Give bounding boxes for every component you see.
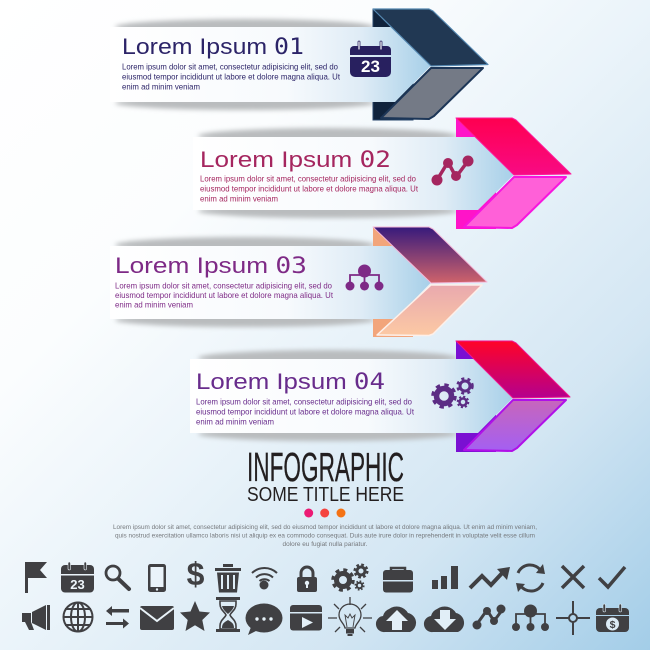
- arrow 4: [190, 341, 570, 452]
- icon: gears: [433, 378, 472, 407]
- subheading: SOME TITLE HERE: [247, 483, 404, 506]
- title 3: Lorem Ipsum 03: [115, 253, 307, 279]
- icon: calendar: [350, 41, 391, 77]
- icon: nodes: [432, 156, 474, 186]
- icon: tablet: [148, 564, 166, 592]
- icon: globe: [63, 602, 93, 632]
- text block 3: [115, 280, 334, 310]
- text block 1: [122, 62, 341, 92]
- text block 2: Lorem ipsum dolor sit amet, consectetur adipisicing elit, sed do: [200, 174, 416, 184]
- icon: mail: [140, 606, 174, 630]
- heading: infographic: INFOGRAPHIC: [247, 444, 404, 490]
- icon: flag: [25, 562, 47, 593]
- panel: step 2: [193, 118, 571, 229]
- icon: trash: [215, 564, 241, 592]
- text block: description: quis nostrud exercitation ullamco laboris nisi ut aliquip ex ea commodo consequat. Duis aute irure dolor in reprehenderit in voluptate velit esse cillum: [115, 532, 535, 540]
- arrow 2: [193, 118, 571, 229]
- text block: description: [113, 524, 537, 548]
- icon: search: [106, 566, 129, 589]
- panel: step 4: [190, 341, 570, 452]
- icon: signal bars: [432, 566, 458, 589]
- icon: gears: [333, 565, 367, 590]
- title 4: Lorem Ipsum 04: [196, 369, 385, 395]
- icon: calendar dollar: [596, 604, 629, 632]
- text block 1: Lorem ipsum dolor sit amet, consectetur adipisicing elit, sed do: [122, 62, 338, 72]
- text block 4: Lorem ipsum dolor sit amet, consectetur adipisicing elit, sed do: [196, 396, 412, 406]
- icon: check: [599, 567, 625, 587]
- icon row: [22, 556, 629, 636]
- text block: description: Lorem ipsum dolor sit amet, consectetur adipisicing elit, sed do eiusmod tempor incididunt ut labore et dolore magna aliqua. Ut enim ad minim veniam,: [113, 524, 537, 531]
- icon: cloud upload: [376, 606, 416, 632]
- icon: transfer arrows: [106, 606, 129, 628]
- icon: star: [180, 601, 210, 631]
- title 2: Lorem Ipsum 02: [200, 147, 391, 173]
- icon: trend line: [470, 567, 510, 588]
- banner shadow 2: [198, 128, 458, 218]
- text block 1: eiusmod tempor incididunt ut labore et dolore magna aliqua. Ut: [122, 72, 341, 82]
- icon: calendar: 23: [70, 577, 85, 592]
- banner shadow 3: [115, 237, 375, 327]
- text block 3: enim ad minim veniam: [115, 300, 193, 310]
- icon: refresh: [516, 564, 545, 592]
- icon: calendar dollar: $: [610, 619, 616, 631]
- three dots: [304, 508, 346, 518]
- panel: step 3: [110, 227, 487, 337]
- text block 3: eiusmod tempor incididunt ut labore et dolore magna aliqua. Ut: [115, 290, 334, 300]
- arrow 3: [110, 227, 487, 337]
- icon: crosshair: [556, 601, 590, 635]
- text block 4: enim ad minim veniam: [196, 416, 274, 426]
- icon: calendar: 23: [361, 57, 380, 76]
- panel: step 1: [110, 9, 488, 120]
- text block 4: [196, 396, 415, 426]
- text block 2: enim ad minim veniam: [200, 194, 278, 204]
- text block: description: dolore eu fugiat nulla pariatur.: [282, 541, 368, 548]
- icon: org chart: [512, 604, 549, 631]
- icon: video window: [290, 605, 322, 630]
- banner shadow 4: [198, 350, 458, 441]
- icon: briefcase: [383, 568, 413, 592]
- text block 3: Lorem ipsum dolor sit amet, consectetur adipisicing elit, sed do: [115, 280, 332, 290]
- banner shadow 1: [115, 19, 375, 110]
- icon: dollar: $: [187, 556, 205, 592]
- icon: hourglass: [216, 597, 240, 632]
- icon: cloud download: [424, 606, 464, 632]
- text block 4: eiusmod tempor incididunt ut labore et dolore magna aliqua. Ut: [196, 406, 415, 416]
- text block 1: enim ad minim veniam: [122, 82, 200, 92]
- text block 2: eiusmod tempor incididunt ut labore et dolore magna aliqua. Ut: [200, 184, 419, 194]
- icon: calendar: [61, 562, 94, 592]
- icon: nodes: [472, 604, 506, 630]
- icon: megaphone: [22, 605, 50, 630]
- icon: light bulb: [328, 597, 372, 636]
- title 1: Lorem Ipsum 01: [122, 34, 304, 60]
- arrow 1: [110, 9, 488, 120]
- icon: speech bubble: [246, 604, 282, 635]
- icon: org chart: [346, 264, 384, 290]
- icon: lock: [297, 567, 317, 592]
- text block 2: [200, 174, 419, 204]
- icon: cross: [562, 566, 584, 588]
- icon: wifi: [252, 568, 277, 590]
